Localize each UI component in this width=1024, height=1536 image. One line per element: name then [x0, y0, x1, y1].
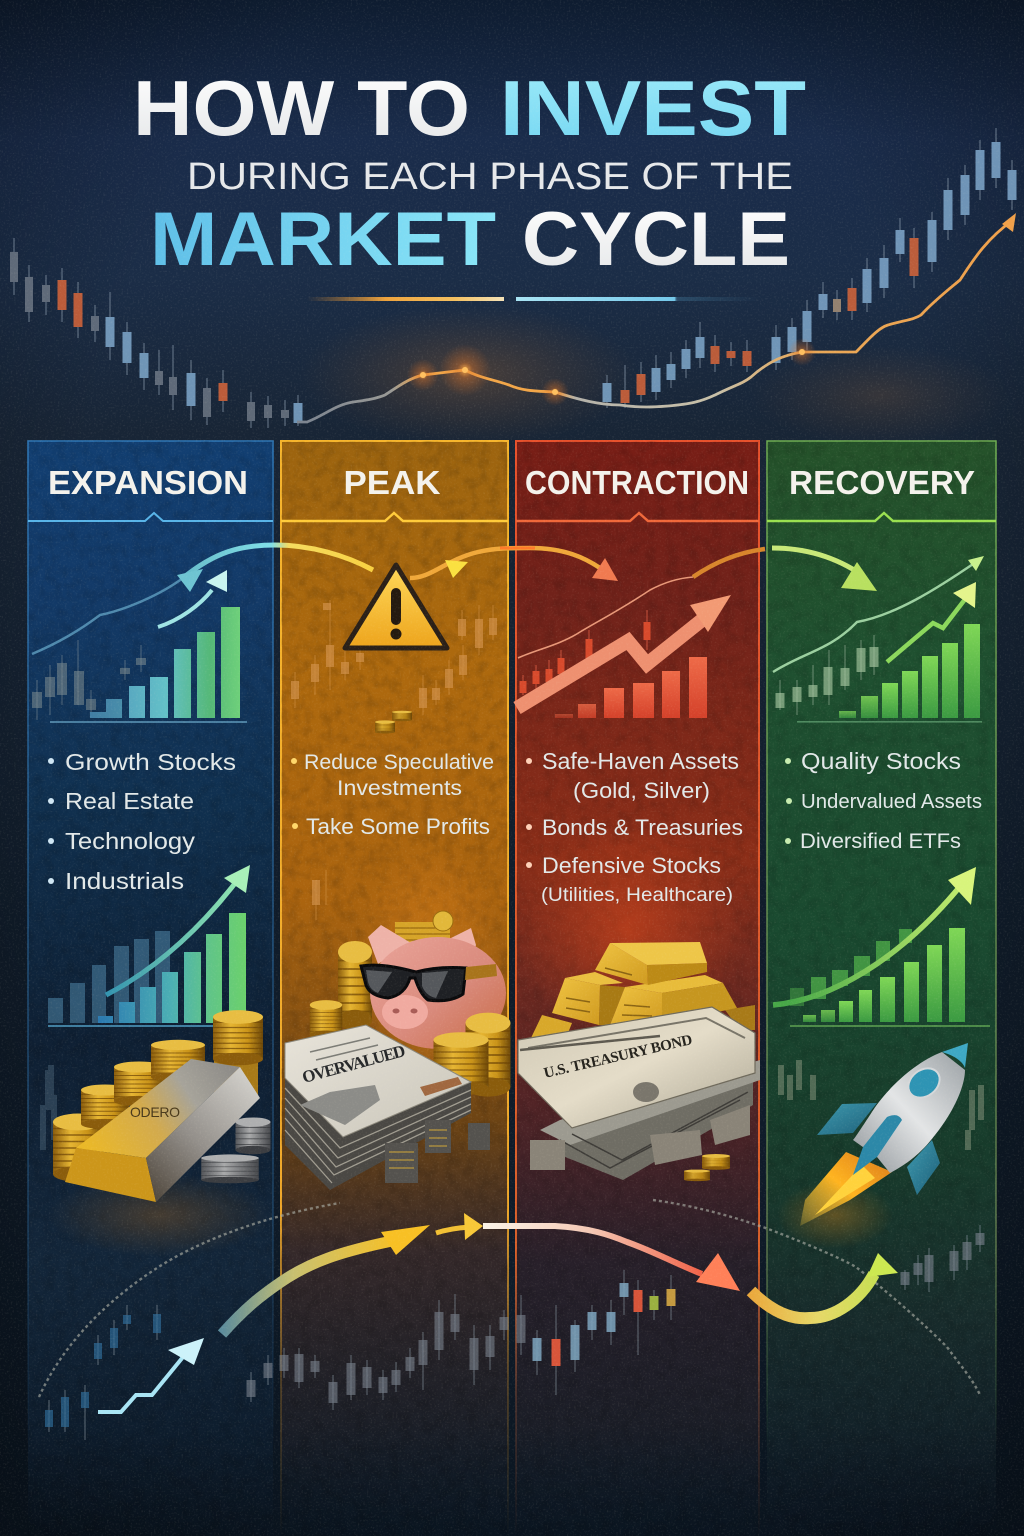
- illustration: piggy, coins and overvalued newspaper: [285, 911, 510, 1190]
- bullet list: contraction: (Gold, Silver): [573, 778, 710, 803]
- trend arrow: expansion small: [158, 570, 227, 627]
- coin stacks right: [434, 1013, 510, 1097]
- bar chart: recovery lower: [790, 928, 990, 1027]
- trend arrow: recovery small: [887, 582, 976, 662]
- bullet list: expansion: Growth Stocks: [65, 749, 236, 775]
- title underline: [307, 297, 760, 301]
- trend arrow: expansion thin: [32, 578, 183, 654]
- bullet list: recovery: Quality Stocks: [801, 748, 961, 774]
- gold and silver bar: ODERO: [130, 1104, 180, 1120]
- newspaper stack: OVERVALUED: [300, 1041, 407, 1087]
- bullet list: expansion: Industrials: [65, 868, 184, 894]
- bonds: [518, 1007, 760, 1181]
- bar chart: expansion lower: [48, 913, 248, 1027]
- panel: peak: [281, 441, 510, 1536]
- heading: recovery: RECOVERY: [789, 464, 975, 501]
- title: [133, 64, 806, 282]
- arrow: bottom lime: [751, 1253, 898, 1318]
- header divider with notch: [516, 513, 759, 521]
- bonds: U.S. TREASURY BOND: [542, 1032, 694, 1082]
- title: CYCLE: [522, 197, 790, 282]
- header divider with notch: [767, 513, 996, 521]
- flow arrows: bottom cycle: [39, 1200, 980, 1440]
- illustration: gold bars and treasury bonds: [518, 942, 760, 1181]
- candles: contraction: [523, 610, 647, 695]
- heading: peak: PEAK: [344, 464, 441, 501]
- bullet list: expansion: [48, 749, 236, 894]
- panel: contraction: [515, 441, 760, 1536]
- title: HOW TO: [133, 64, 470, 152]
- small gold coins: [702, 1154, 730, 1170]
- arrow: bottom red: [483, 1226, 740, 1291]
- bullet list: contraction: Defensive Stocks: [542, 853, 721, 878]
- candles: peak: [295, 600, 493, 920]
- candles: expansion lower: [43, 1065, 54, 1150]
- baseline: [50, 721, 247, 723]
- piggy bank: [361, 925, 506, 1049]
- icon: rocket: [800, 1043, 968, 1226]
- bullet list: peak: Take Some Profits: [306, 814, 490, 839]
- bar chart: expansion upper: [90, 607, 240, 718]
- heading: expansion: EXPANSION: [48, 464, 248, 501]
- bar chart: recovery upper: [839, 624, 980, 718]
- title: INVEST: [500, 64, 806, 152]
- arrow: bottom yellow: [222, 1225, 430, 1334]
- ears: [368, 925, 411, 964]
- coin stacks behind pig: [310, 911, 453, 1040]
- bullet list: recovery: Diversified ETFs: [800, 830, 961, 853]
- icon: warning triangle: [345, 565, 447, 648]
- bullet list: contraction: Bonds & Treasuries: [542, 815, 743, 840]
- rising arrow: contraction large: [517, 595, 731, 708]
- coin stacks: [53, 1010, 270, 1183]
- bullet list: contraction: Safe-Haven Assets: [542, 748, 739, 774]
- bullet list: expansion: Real Estate: [65, 788, 194, 814]
- heading: contraction: CONTRACTION: [525, 464, 749, 501]
- header divider with notch: [28, 513, 273, 521]
- bullet list: expansion: Technology: [65, 828, 196, 854]
- title: MARKET: [150, 197, 496, 282]
- bullet list: recovery: Undervalued Assets: [801, 791, 982, 813]
- candles: bottom band: [49, 1225, 980, 1440]
- title: DURING EACH PHASE OF THE: [187, 156, 793, 198]
- panel: recovery: [767, 441, 996, 1536]
- candles: expansion upper: [37, 640, 141, 720]
- snout: [382, 995, 428, 1029]
- bullet list: contraction: [526, 748, 743, 906]
- dashed cycle arc: [39, 1200, 980, 1397]
- candlestick chart: top band: [14, 128, 1012, 428]
- arrow: recovery lower growth: [773, 867, 976, 1005]
- candles: recovery rocket background: [781, 1060, 981, 1150]
- arrow: expansion lower growth: [106, 865, 250, 995]
- arrow: bottom blue: [98, 1338, 204, 1412]
- growth line across top band: [297, 213, 1016, 422]
- bullet list: peak: [291, 751, 494, 839]
- bullet list: peak: Investments: [337, 777, 462, 800]
- sunglasses: [361, 964, 497, 1001]
- trend arrow: recovery thin: [773, 556, 984, 672]
- bullet list: peak: Reduce Speculative: [304, 751, 494, 774]
- flow arrows: top swoosh: [177, 545, 877, 658]
- bullet list: contraction: (Utilities, Healthcare): [541, 885, 733, 906]
- panel: expansion: [28, 441, 273, 1536]
- coins: small pile: [375, 711, 412, 734]
- arrow: bottom small yellow: [436, 1227, 470, 1233]
- gold bars: [531, 942, 755, 1038]
- glow: contraction middle: [515, 820, 745, 1040]
- header divider with notch: [281, 513, 508, 521]
- bar chart: contraction: [555, 657, 707, 718]
- bullet list: recovery: [785, 748, 982, 853]
- glow: peak middle: [352, 845, 508, 1125]
- gold and silver bar: [65, 1059, 260, 1202]
- newspaper stack: [285, 1025, 490, 1190]
- illustration: coins and gold-silver bar: [53, 1010, 270, 1202]
- candles: recovery: [780, 635, 874, 715]
